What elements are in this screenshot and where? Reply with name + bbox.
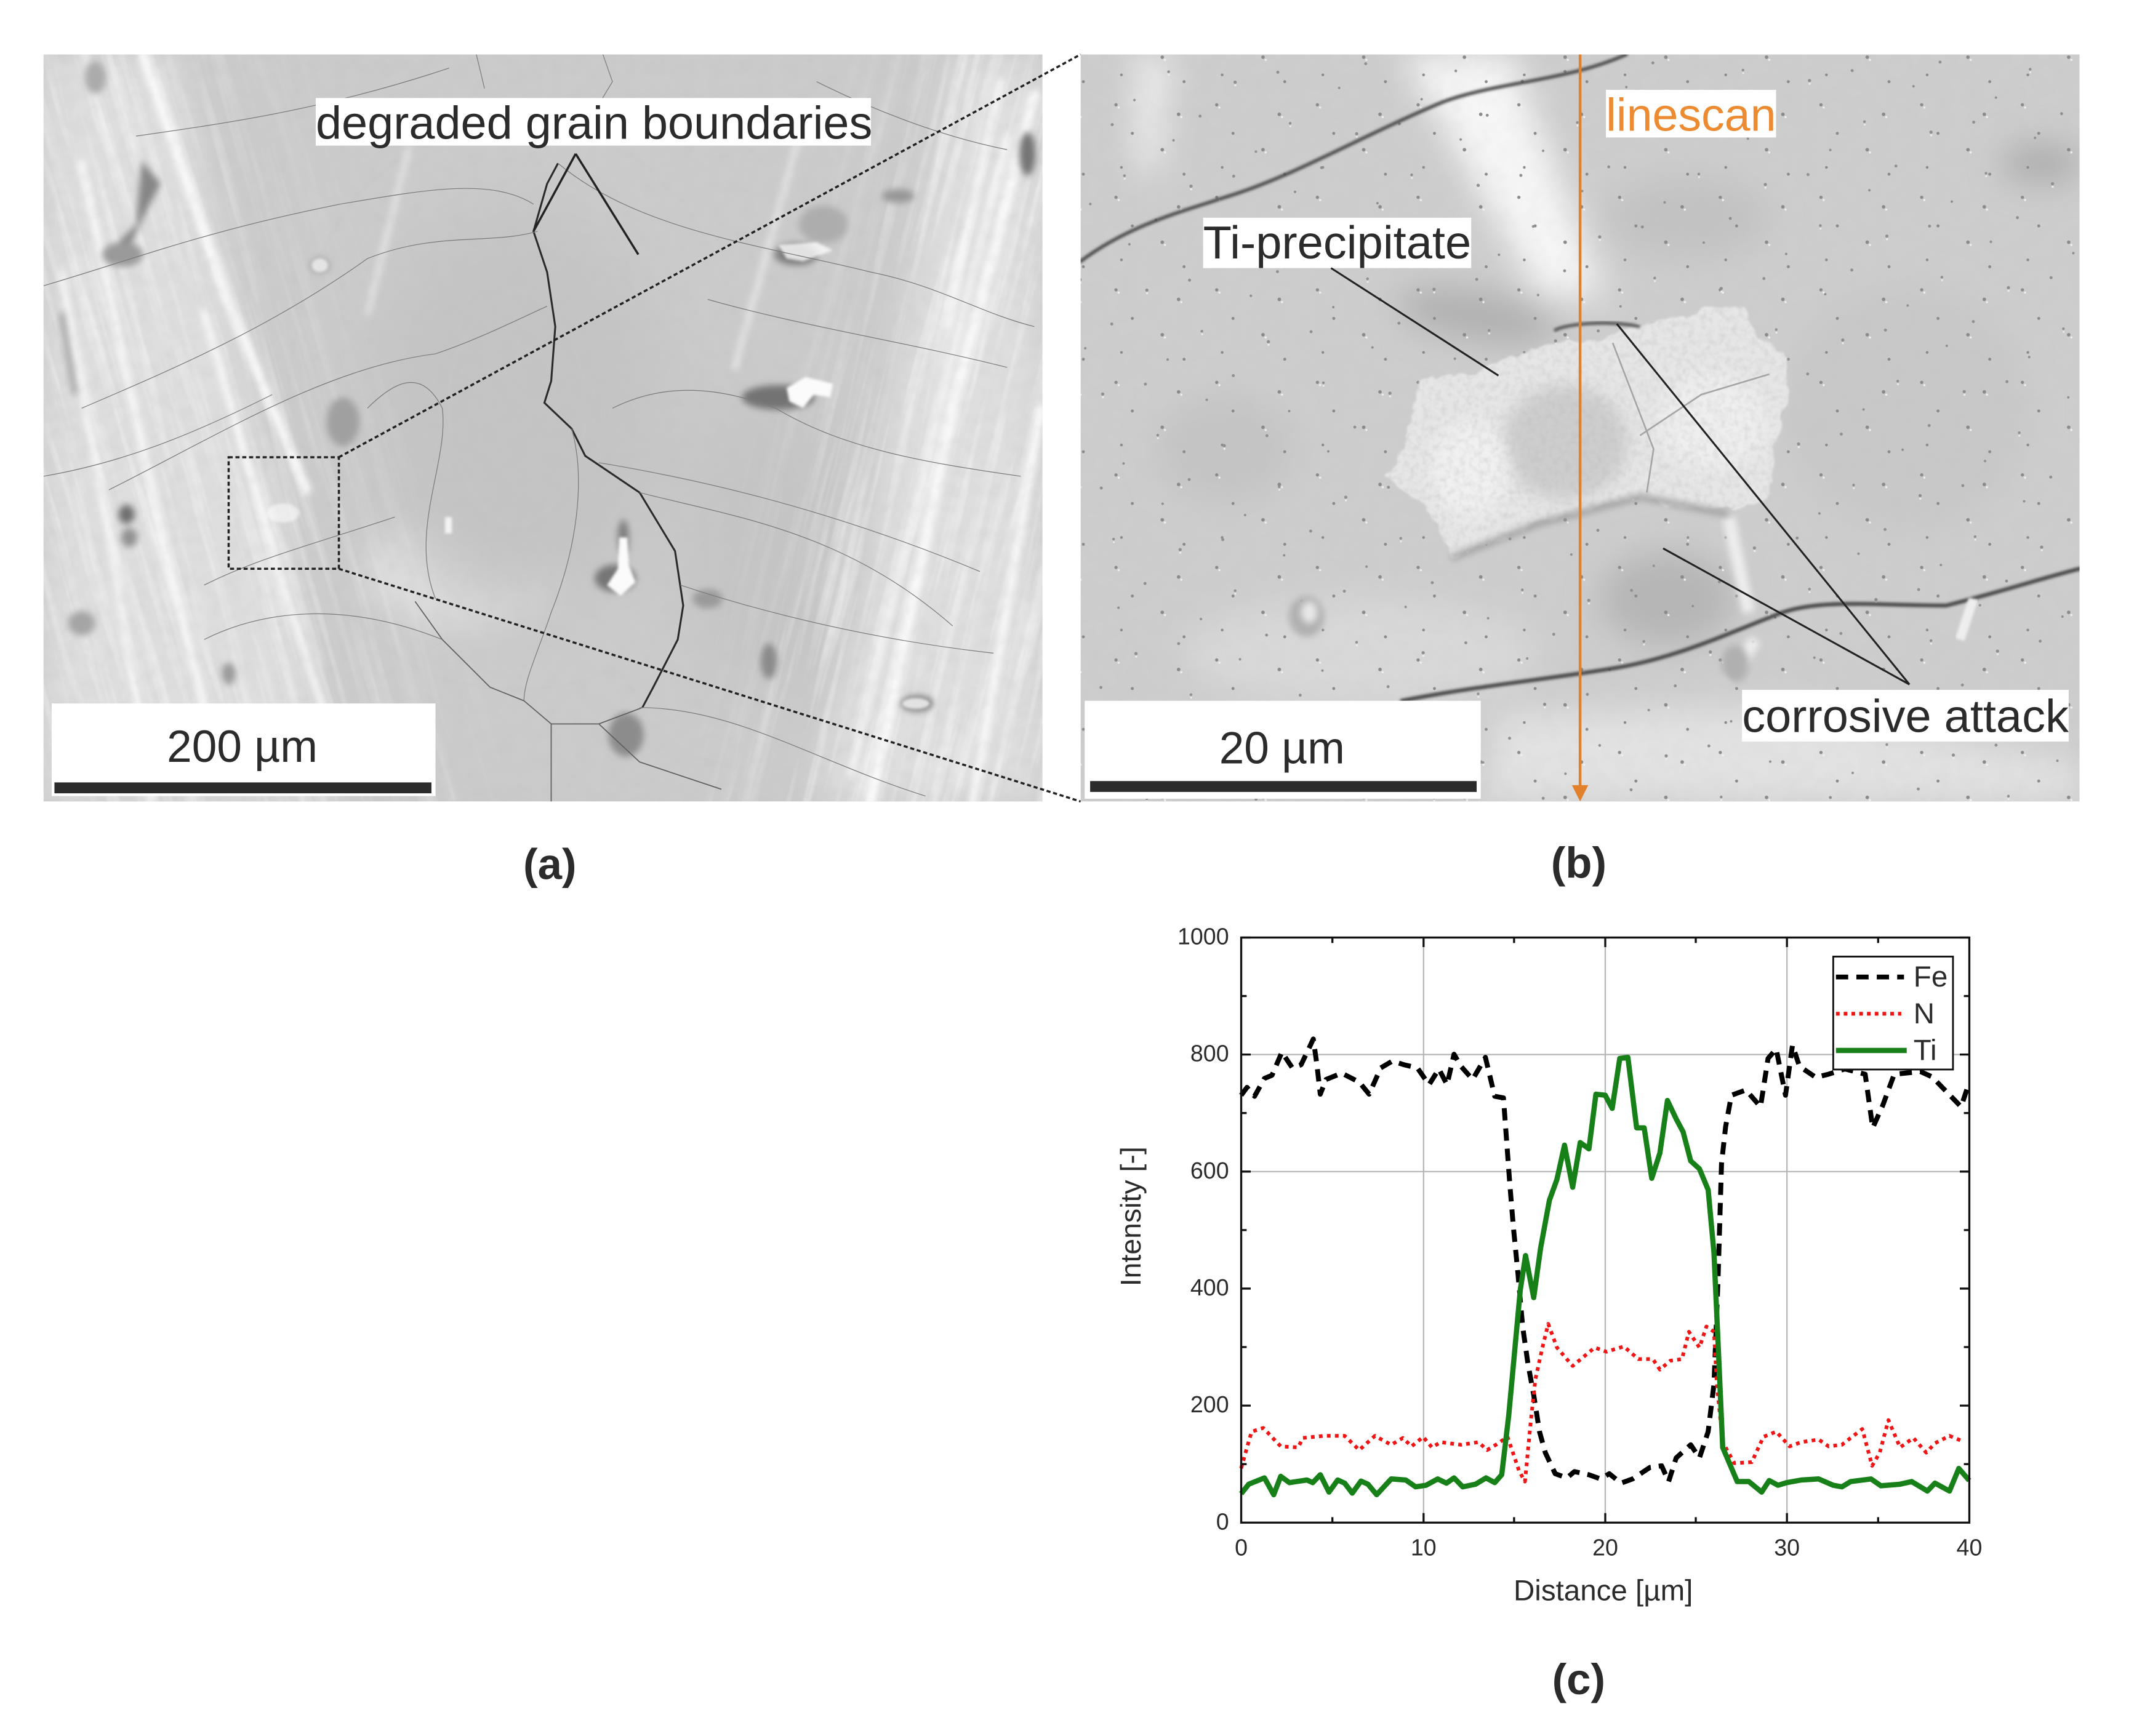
y axis tick labels: 0 bbox=[1216, 1508, 1229, 1534]
zoom region marker bbox=[228, 54, 1081, 801]
label (a): (a) bbox=[523, 839, 577, 888]
scale bar: 200 µm bbox=[52, 703, 436, 796]
x axis title: Distance [µm] bbox=[1514, 1574, 1693, 1607]
x axis tick labels: 20 bbox=[1592, 1534, 1618, 1560]
label (b): (b) bbox=[1551, 838, 1607, 887]
x axis tick labels: 0 bbox=[1235, 1534, 1248, 1560]
callout: corrosive attack bbox=[1617, 324, 2069, 742]
x axis tick labels bbox=[1235, 1534, 1982, 1560]
legend: Ti bbox=[1914, 1034, 1937, 1066]
grid lines bbox=[1241, 937, 1969, 1522]
x axis tick labels: 10 bbox=[1411, 1534, 1437, 1560]
light wear bands bbox=[44, 54, 1043, 801]
scale bar: 200 µm: 200 µm bbox=[167, 722, 318, 772]
panel: SEM detail (b) bbox=[1081, 54, 2082, 801]
panel: SEM overview (a) bbox=[0, 0, 1275, 950]
series: Fe bbox=[1241, 1039, 1969, 1483]
label: linescan: linescan bbox=[1606, 89, 1776, 140]
data series bbox=[1241, 1039, 1969, 1495]
white streaks bbox=[61, 54, 1041, 801]
callout: corrosive attack: corrosive attack bbox=[1742, 690, 2069, 742]
callout: Ti-precipitate bbox=[1203, 217, 1498, 375]
y axis tick labels: 400 bbox=[1190, 1274, 1229, 1300]
callout: degraded grain boundaries: degraded grain boundaries bbox=[316, 97, 872, 149]
plot frame and ticks bbox=[1241, 937, 1969, 1522]
label (c): (c) bbox=[1552, 1655, 1605, 1703]
thin grain boundaries bbox=[44, 54, 1034, 796]
bright and dark relief bbox=[1136, 54, 2082, 801]
legend bbox=[1833, 956, 1953, 1070]
y axis tick labels: 200 bbox=[1190, 1391, 1229, 1417]
x axis tick labels: 30 bbox=[1774, 1534, 1800, 1560]
main degraded grain boundary crack bbox=[534, 163, 683, 708]
series: N bbox=[1241, 1324, 1962, 1482]
grain boundaries bbox=[1081, 54, 2080, 701]
y axis tick labels: 800 bbox=[1190, 1041, 1229, 1066]
y axis tick labels: 600 bbox=[1190, 1158, 1229, 1183]
x axis tick labels: 40 bbox=[1957, 1534, 1982, 1560]
chart: linescan intensity vs distance (c) bbox=[1115, 924, 1982, 1607]
y axis tick labels bbox=[1177, 924, 1229, 1534]
scale bar: 20 µm bbox=[1085, 701, 1481, 799]
scale bar: 20 µm: 20 µm bbox=[1219, 723, 1345, 773]
callout: Ti-precipitate: Ti-precipitate bbox=[1203, 217, 1471, 268]
series: Ti bbox=[1241, 1057, 1969, 1495]
legend: N bbox=[1914, 998, 1935, 1030]
y axis title: Intensity [-] bbox=[1115, 1146, 1147, 1286]
legend: Fe bbox=[1914, 961, 1947, 993]
y axis tick labels: 1000 bbox=[1177, 924, 1229, 950]
callout: degraded grain boundaries bbox=[316, 97, 872, 255]
dark features and particles bbox=[61, 62, 1036, 756]
Ti-precipitate particle bbox=[1388, 305, 1790, 558]
directional polish texture bbox=[44, 54, 452, 801]
arrow: linescan bbox=[1572, 54, 1588, 801]
